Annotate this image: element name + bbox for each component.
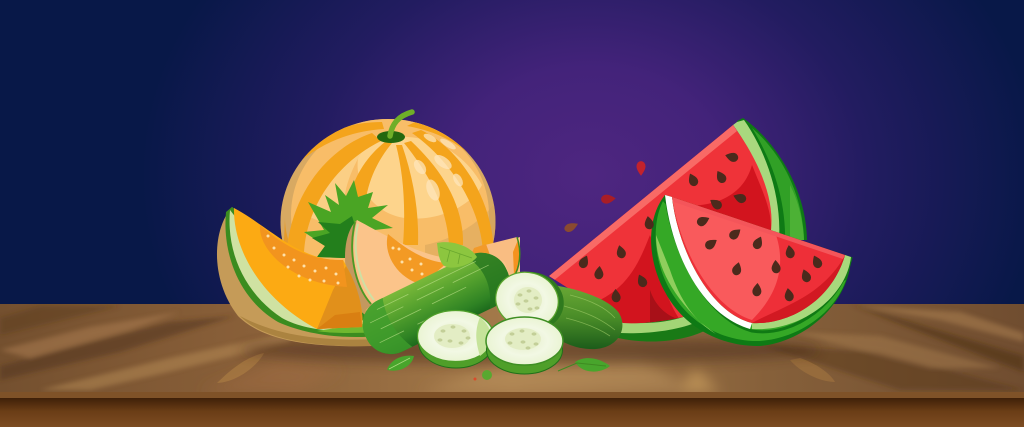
back slice outer rind: [737, 118, 807, 240]
table front: [0, 398, 1024, 427]
shadow under fruits: [240, 336, 820, 364]
wood grain streaks: [0, 304, 1024, 392]
cucumber ridges: [366, 257, 498, 343]
back slice flesh: [549, 125, 772, 323]
melon stem: [377, 112, 412, 143]
small dot leaf and berries: [474, 370, 492, 380]
back slice pale rind: [733, 120, 779, 240]
melon wedge, large front: [217, 207, 395, 346]
wedge seed cavity: [387, 234, 447, 283]
wooden table: [0, 304, 1024, 427]
melon light dome: [358, 137, 482, 219]
large wedge seed band: [260, 225, 347, 287]
cucumber slice, top: [489, 264, 570, 338]
melon leaf star: [304, 180, 393, 258]
front slice white rind: [665, 195, 752, 329]
cucumber, back right: [545, 285, 622, 349]
slice seed cloud: [505, 328, 541, 350]
leaf, lower right: [558, 358, 610, 372]
cucumber slice, right: [486, 317, 563, 374]
background: purple radial glow: [0, 0, 1024, 305]
melon wedge, back right: [345, 220, 520, 312]
cucumber slice, left: [418, 310, 494, 368]
whole melon: [280, 112, 497, 330]
front slice outer rind: [651, 195, 851, 346]
melon body: [291, 119, 489, 264]
melon lower-right shade: [425, 206, 496, 256]
watermelon, back slice: [549, 118, 807, 342]
front slice flesh: [672, 197, 845, 323]
cucumber right end: [472, 252, 509, 309]
leaf on cucumber: [437, 242, 477, 268]
melon highlights: [414, 134, 463, 200]
front slice pale rind: [752, 255, 851, 329]
slice pale side: [476, 317, 491, 356]
slice seed cloud: [434, 324, 470, 348]
table edge: [0, 392, 1024, 398]
watermelon seeds: [577, 151, 824, 303]
melon lower-left orange: [284, 220, 288, 243]
flying seeds: [563, 161, 646, 234]
melon stripes: [286, 122, 494, 262]
leaf, lower left: [387, 356, 414, 371]
slice seed cloud: [514, 287, 542, 313]
cucumber, front left: [362, 252, 509, 354]
large wedge flesh: [234, 208, 362, 329]
cucumber left end: [362, 298, 412, 354]
wood knots: [217, 353, 264, 383]
watermelon, front slice: [651, 195, 851, 346]
back slice bottom rind: [618, 310, 715, 342]
